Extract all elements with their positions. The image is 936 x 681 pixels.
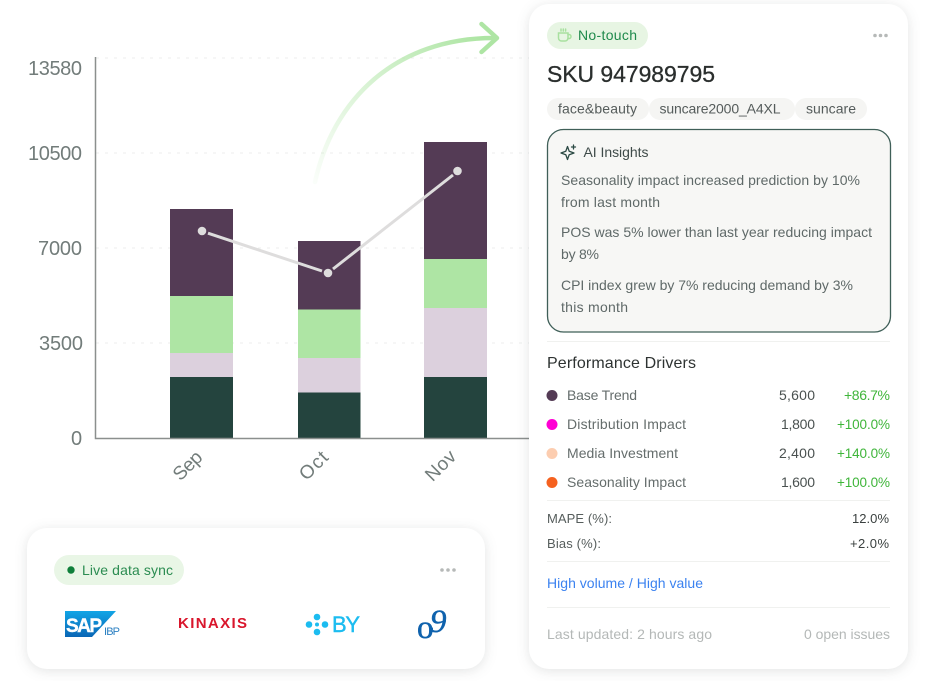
driver: seasonality impact: 1,600 xyxy=(781,474,815,490)
title: SKU: SKU 947989795 xyxy=(547,61,715,87)
logo: Kinaxis: KINAXIS xyxy=(178,615,247,632)
y axis labels: 0 xyxy=(71,428,82,450)
driver: base trend: 5,600 xyxy=(779,387,815,403)
tags xyxy=(547,98,867,120)
x axis labels: Sep xyxy=(169,447,207,485)
bar: Nov xyxy=(424,142,487,438)
callout: AI insights: AI Insights xyxy=(584,144,648,160)
y axis labels xyxy=(28,58,83,450)
status pill: live data sync: Live data sync xyxy=(82,562,173,578)
driver: seasonality impact xyxy=(546,474,890,490)
panel: SKU detail xyxy=(529,4,908,669)
x axis labels xyxy=(169,446,461,486)
bar: Sep xyxy=(170,209,233,438)
x axis labels: Oct xyxy=(295,447,333,485)
tags: suncare2000_A4XL xyxy=(660,100,781,116)
logo: BY: BY xyxy=(332,612,360,637)
metric: Bias xyxy=(547,536,889,551)
metric: MAPE: MAPE (%): xyxy=(547,511,612,526)
logo: SAP IBP: SAP xyxy=(66,616,102,637)
driver: media investment: 2,400 xyxy=(779,445,815,461)
insight text: CPI index grew by 7% reducing demand by 3% xyxy=(561,277,853,293)
icon: coffee cup xyxy=(558,29,571,41)
footer: open issues: 0 open issues xyxy=(804,626,890,642)
driver: distribution impact: Distribution Impact xyxy=(567,416,686,432)
stacked bar chart xyxy=(28,57,530,486)
classification link: High volume / High value xyxy=(547,575,703,591)
x axis labels: Nov xyxy=(421,446,461,486)
y axis labels: 7000 xyxy=(38,238,82,260)
insight text: from last month xyxy=(561,194,660,210)
metric: Bias: Bias (%): xyxy=(547,536,601,551)
driver: media investment: Media Investment xyxy=(567,445,678,461)
trend line xyxy=(198,167,462,277)
driver: distribution impact: 1,800 xyxy=(781,416,815,432)
driver: base trend xyxy=(546,387,890,403)
tags: suncare xyxy=(806,100,856,116)
menu dots xyxy=(440,568,456,572)
tags: face&beauty xyxy=(558,100,637,116)
insight text: this month xyxy=(561,299,628,315)
insight text: POS was 5% lower than last year reducing impact xyxy=(561,224,872,240)
logo: o9: 9 xyxy=(430,604,446,640)
logo: SAP IBP: IBP xyxy=(104,626,120,638)
driver: seasonality impact: Seasonality Impact xyxy=(567,474,686,490)
driver: base trend: +86.7% xyxy=(844,387,890,403)
status pill: live data sync xyxy=(54,555,184,585)
insight text xyxy=(561,172,872,315)
icon: sparkle xyxy=(561,145,576,160)
y axis labels: 3500 xyxy=(39,333,83,355)
insight text: by 8% xyxy=(561,246,599,262)
metric: MAPE xyxy=(547,511,889,526)
metric: MAPE: 12.0% xyxy=(852,511,889,526)
panel: live data sync xyxy=(27,528,485,669)
driver: media investment xyxy=(546,445,890,461)
status pill: no-touch xyxy=(547,22,648,49)
insight text: Seasonality impact increased prediction by 10% xyxy=(561,172,860,188)
menu dots xyxy=(873,34,888,37)
arrow xyxy=(315,24,497,182)
status pill: no-touch: No-touch xyxy=(578,27,637,43)
y axis labels: 10500 xyxy=(28,143,82,165)
footer: last updated: Last updated: 2 hours ago xyxy=(547,626,712,642)
chart axes xyxy=(96,57,530,438)
heading: performance drivers: Performance Drivers xyxy=(547,355,696,372)
driver: media investment: +140.0% xyxy=(837,446,890,461)
driver: distribution impact: +100.0% xyxy=(837,417,890,432)
driver: seasonality impact: +100.0% xyxy=(837,475,890,490)
y axis labels: 13580 xyxy=(28,58,82,80)
logo: o9 xyxy=(417,604,446,646)
bar: Oct xyxy=(298,241,360,438)
driver: distribution impact xyxy=(546,416,890,432)
logo: BY xyxy=(306,612,360,637)
logo: SAP IBP xyxy=(65,611,120,638)
driver: base trend: Base Trend xyxy=(567,387,637,403)
callout: AI insights xyxy=(548,130,890,332)
metric: Bias: +2.0% xyxy=(850,536,889,551)
logo: o9: o xyxy=(417,610,434,646)
